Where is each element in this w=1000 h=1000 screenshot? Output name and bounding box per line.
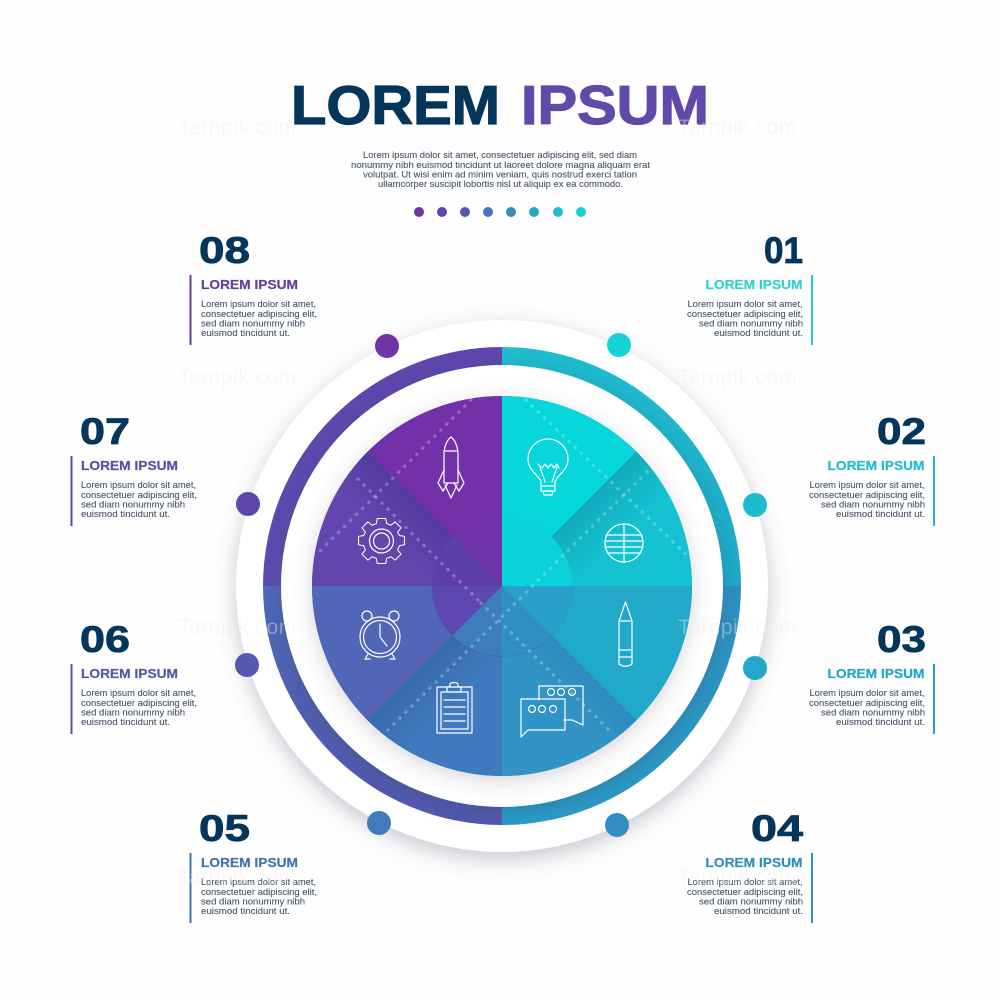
wedge 5 (368, 586, 502, 776)
watermarks: Tarnpik.com (678, 616, 797, 639)
block 03: 03 (877, 619, 926, 660)
block 06: LOREM IPSUM (81, 667, 178, 681)
block 07: Lorem ipsum dolor sit amet, (81, 480, 196, 490)
watermarks: Tarnpik.com (178, 366, 297, 389)
block 06 (70, 619, 197, 734)
block 01: euismod tincidunt ut. (714, 328, 803, 338)
connector dots (235, 333, 767, 837)
wedge 8 (368, 396, 502, 586)
icon: speech bubbles (521, 686, 583, 737)
block 02 (809, 411, 935, 526)
icon: rocket (438, 437, 464, 498)
block 07: sed diam nonummy nibh (81, 500, 185, 510)
block 07: 07 (80, 411, 130, 452)
block 05: Lorem ipsum dolor sit amet, (201, 877, 316, 887)
intro paragraph: ullamcorper suscipit lobortis nisl ut aliquip ex ea commodo. (378, 179, 623, 189)
watermarks (178, 116, 797, 889)
pie wheel (312, 396, 692, 776)
block 04: LOREM IPSUM (706, 856, 802, 870)
block 04: consectetuer adipiscing elit, (687, 887, 803, 897)
block 03: euismod tincidunt ut. (836, 717, 925, 727)
block 02: 02 (877, 411, 926, 452)
icon: gear (359, 518, 404, 564)
block 05: 05 (199, 808, 250, 849)
block 03: Lorem ipsum dolor sit amet, (810, 688, 924, 698)
icon: globe (605, 524, 643, 562)
intro paragraph (351, 150, 650, 189)
block 04: sed diam nonummy nibh (699, 896, 803, 906)
watermarks: Tarnpik.com (178, 116, 297, 139)
block 05: consectetuer adipiscing elit, (201, 887, 317, 897)
block 08: euismod tincidunt ut. (201, 328, 290, 338)
block 08: consectetuer adipiscing elit, (201, 309, 317, 319)
block 05: sed diam nonummy nibh (201, 896, 305, 906)
block 05: LOREM IPSUM (201, 856, 298, 870)
intro paragraph: Lorem ipsum dolor sit amet, consectetuer adipiscing elit, sed diam (363, 150, 637, 160)
block 07 (70, 411, 197, 526)
intro paragraph: nonummy nibh euismod tincidunt ut laoreet dolore magna aliquam erat (351, 160, 650, 170)
wedge 7 (312, 452, 502, 586)
block 08: Lorem ipsum dolor sit amet, (201, 299, 316, 309)
intro paragraph: volutpat. Ut wisi enim ad minim veniam, quis nostrud exerci tation (363, 170, 637, 180)
block 06: sed diam nonummy nibh (81, 708, 185, 718)
block 07: euismod tincidunt ut. (81, 509, 170, 519)
block 01: sed diam nonummy nibh (699, 318, 803, 328)
block 04: Lorem ipsum dolor sit amet, (688, 877, 802, 887)
block 08 (190, 230, 317, 345)
block 08: LOREM IPSUM (201, 278, 298, 292)
block 02: consectetuer adipiscing elit, (809, 490, 925, 500)
watermarks: Tarnpik.com (678, 116, 797, 139)
block 04 (687, 808, 813, 923)
block 01: LOREM IPSUM (706, 278, 802, 292)
block 06: consectetuer adipiscing elit, (81, 698, 197, 708)
outer white disc (236, 320, 768, 852)
block 02: euismod tincidunt ut. (836, 509, 925, 519)
block 03: LOREM IPSUM (828, 667, 924, 681)
block 08: sed diam nonummy nibh (201, 318, 305, 328)
block 06: 06 (80, 619, 130, 660)
title (291, 74, 709, 136)
block 03 (809, 619, 935, 734)
watermarks: Tarnpik.com (178, 616, 297, 639)
watermarks: Tarnpik.com (678, 366, 797, 389)
icon: pencil (619, 602, 632, 666)
icon: alarm clock (360, 611, 400, 659)
wedge 4 (502, 586, 636, 776)
block 08: 08 (199, 230, 250, 271)
block 03: sed diam nonummy nibh (821, 708, 925, 718)
block 01: 01 (764, 230, 803, 271)
block 03: consectetuer adipiscing elit, (809, 698, 925, 708)
block 05: euismod tincidunt ut. (201, 906, 290, 916)
watermarks: Tarnpik.com (678, 866, 797, 889)
block 07: LOREM IPSUM (81, 459, 178, 473)
block 01 (687, 230, 813, 345)
wedge shadows (312, 452, 692, 776)
block 02: sed diam nonummy nibh (821, 500, 925, 510)
wedge 6 (312, 586, 502, 720)
wedge 1 (502, 396, 636, 586)
wedge 3 (502, 586, 692, 720)
block 01: Lorem ipsum dolor sit amet, (688, 299, 802, 309)
block 05 (190, 808, 317, 923)
pagination dots (414, 207, 586, 217)
block 01: consectetuer adipiscing elit, (687, 309, 803, 319)
watermarks: Tarnpik.com (178, 866, 297, 889)
icon: light bulb (528, 439, 568, 495)
icon: clipboard (437, 682, 472, 733)
watermark dotted lines (320, 400, 692, 730)
inner white disc (281, 365, 723, 807)
block 06: Lorem ipsum dolor sit amet, (81, 688, 196, 698)
block 04: euismod tincidunt ut. (714, 906, 803, 916)
block 02: LOREM IPSUM (828, 459, 924, 473)
block 02: Lorem ipsum dolor sit amet, (810, 480, 924, 490)
block 07: consectetuer adipiscing elit, (81, 490, 197, 500)
wheel base shadow (312, 396, 692, 776)
wedge 2 (502, 452, 692, 586)
segmented colour ring (263, 347, 741, 825)
title: LOREM (291, 74, 500, 136)
block 04: 04 (751, 808, 804, 849)
block 06: euismod tincidunt ut. (81, 717, 170, 727)
title: IPSUM (521, 74, 709, 136)
centre circle (431, 516, 573, 657)
